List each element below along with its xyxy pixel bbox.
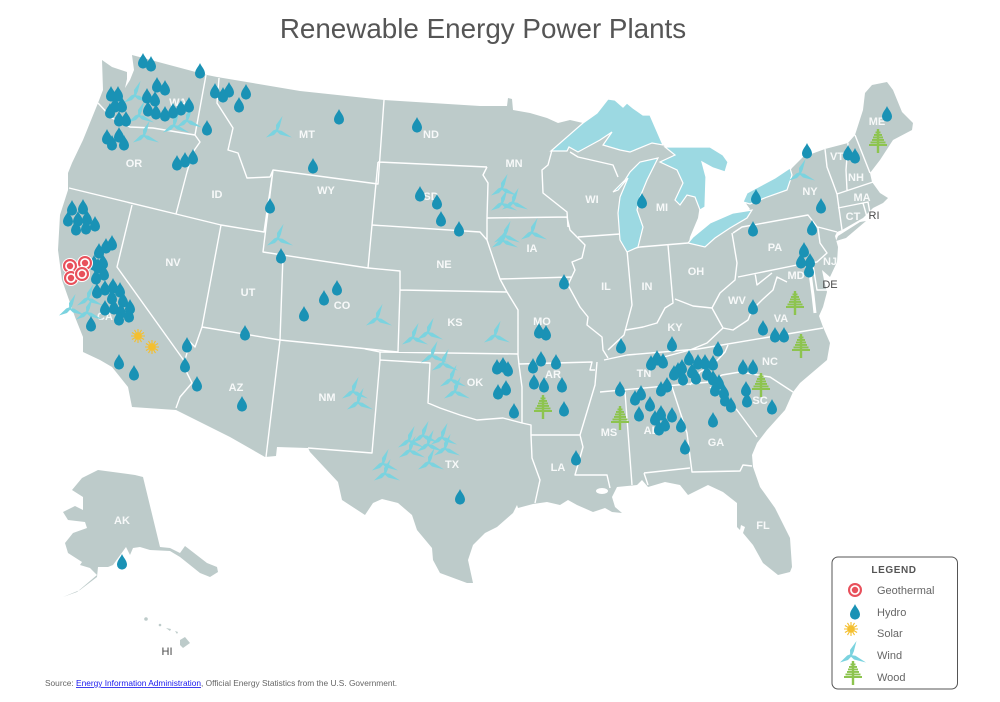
state labels: TX	[445, 459, 460, 471]
state labels: RI	[868, 210, 880, 222]
legend: Hydro	[877, 607, 906, 619]
state labels: FL	[756, 520, 770, 532]
state labels: KY	[667, 322, 683, 334]
state labels: OK	[467, 377, 483, 389]
solar plants	[131, 329, 159, 354]
state labels: AZ	[229, 382, 244, 394]
title: Renewable Energy Power Plants	[280, 13, 686, 44]
map: Hawaii islands	[144, 617, 190, 648]
state labels: PA	[768, 242, 782, 254]
state labels: NC	[762, 356, 778, 368]
state labels: MD	[787, 270, 805, 282]
state labels: WY	[317, 185, 336, 197]
legend: LEGEND	[871, 565, 917, 576]
state labels: NJ	[823, 256, 837, 268]
state labels: MS	[601, 427, 617, 439]
state labels: ID	[212, 189, 223, 201]
state labels: IN	[642, 281, 653, 293]
legend	[832, 557, 958, 689]
state labels: NY	[802, 186, 818, 198]
state labels: GA	[708, 437, 724, 449]
state labels: CT	[846, 211, 861, 223]
state labels: TN	[637, 368, 651, 380]
geothermal plants	[62, 255, 93, 286]
state labels: AK	[114, 515, 130, 527]
state labels: CO	[334, 300, 351, 312]
state labels: HI	[162, 646, 172, 658]
state labels: UT	[241, 287, 256, 299]
state labels: MN	[505, 158, 523, 170]
legend: Wind	[877, 650, 902, 662]
state labels: WI	[585, 194, 599, 206]
state labels: MO	[533, 316, 551, 328]
source note: Source: Energy Information Administration, Official Energy Statistics from the U.S. Government.	[45, 678, 397, 688]
state labels: VT	[830, 151, 844, 163]
state labels: NH	[848, 172, 864, 184]
state labels: OR	[126, 158, 142, 170]
legend: Wood	[877, 672, 906, 684]
state labels: ME	[869, 116, 885, 128]
Lake Michigan	[613, 158, 658, 252]
state labels: AL	[644, 425, 659, 437]
state labels: MA	[853, 192, 871, 204]
Lake Erie	[688, 210, 752, 247]
state labels: NE	[436, 259, 452, 271]
wind plants	[59, 81, 815, 480]
wood plants	[534, 129, 887, 430]
state labels: SC	[752, 395, 768, 407]
state labels: DE	[822, 279, 838, 291]
state labels: OH	[688, 266, 704, 278]
Lake Huron	[660, 147, 728, 210]
map: contiguous United States land	[58, 55, 913, 583]
map: state borders	[69, 75, 873, 503]
state labels: SD	[423, 191, 439, 203]
state labels: WA	[169, 97, 187, 109]
state labels: VA	[774, 313, 788, 325]
hydro plants	[63, 53, 892, 570]
legend: Solar	[877, 628, 903, 640]
Lake Superior	[551, 99, 663, 152]
state labels: LA	[551, 462, 565, 474]
Lake Ontario	[743, 168, 792, 204]
state labels: AR	[545, 369, 561, 381]
state labels: WV	[728, 295, 747, 307]
state labels: MT	[299, 129, 315, 141]
state labels: ND	[423, 129, 439, 141]
state labels: IL	[601, 281, 611, 293]
map: Chesapeake Bay	[810, 273, 815, 313]
state labels: IA	[526, 243, 538, 255]
map: Long Island	[836, 221, 866, 241]
state labels	[97, 97, 885, 658]
map: Alaska land	[63, 470, 218, 597]
state labels: NV	[165, 257, 181, 269]
legend: Geothermal	[877, 585, 934, 597]
state labels: NM	[318, 392, 336, 404]
state labels: CA	[97, 311, 113, 323]
map: Lake Pontchartrain	[596, 488, 608, 494]
state labels: KS	[447, 317, 463, 329]
state labels: MI	[656, 202, 668, 214]
